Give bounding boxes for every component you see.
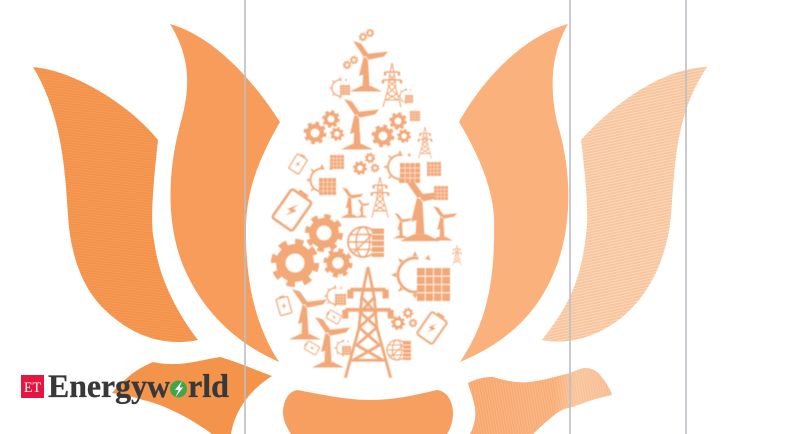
- bottom left leaf: [112, 357, 272, 434]
- inner right petal: [459, 24, 568, 362]
- icons: globes with servers: [348, 227, 411, 360]
- logo: wordmark: [48, 369, 229, 405]
- logo: wordmark: Energyw: [48, 369, 170, 405]
- far left petal: [33, 67, 198, 342]
- bottom right leaf: [468, 368, 612, 434]
- logo: ET badge: ET: [24, 380, 41, 396]
- logo: ET badge: [21, 375, 44, 398]
- logo: wordmark: rld: [188, 369, 229, 405]
- far right petal: [542, 67, 707, 342]
- icons: batteries: [272, 153, 449, 355]
- icons: gears: [274, 29, 417, 329]
- icons: wind turbines: [289, 41, 457, 368]
- vertical gray guide lines: [245, 0, 686, 434]
- logo: green bolt o: [170, 380, 187, 398]
- energy icon cluster in drop shape: [272, 29, 461, 378]
- inner left petal: [170, 24, 280, 362]
- bottom center base: [283, 390, 453, 434]
- icons: sun and solar panels: [306, 77, 450, 357]
- logo: ET Energyworld: [21, 369, 229, 405]
- icons: transmission towers: [345, 63, 461, 378]
